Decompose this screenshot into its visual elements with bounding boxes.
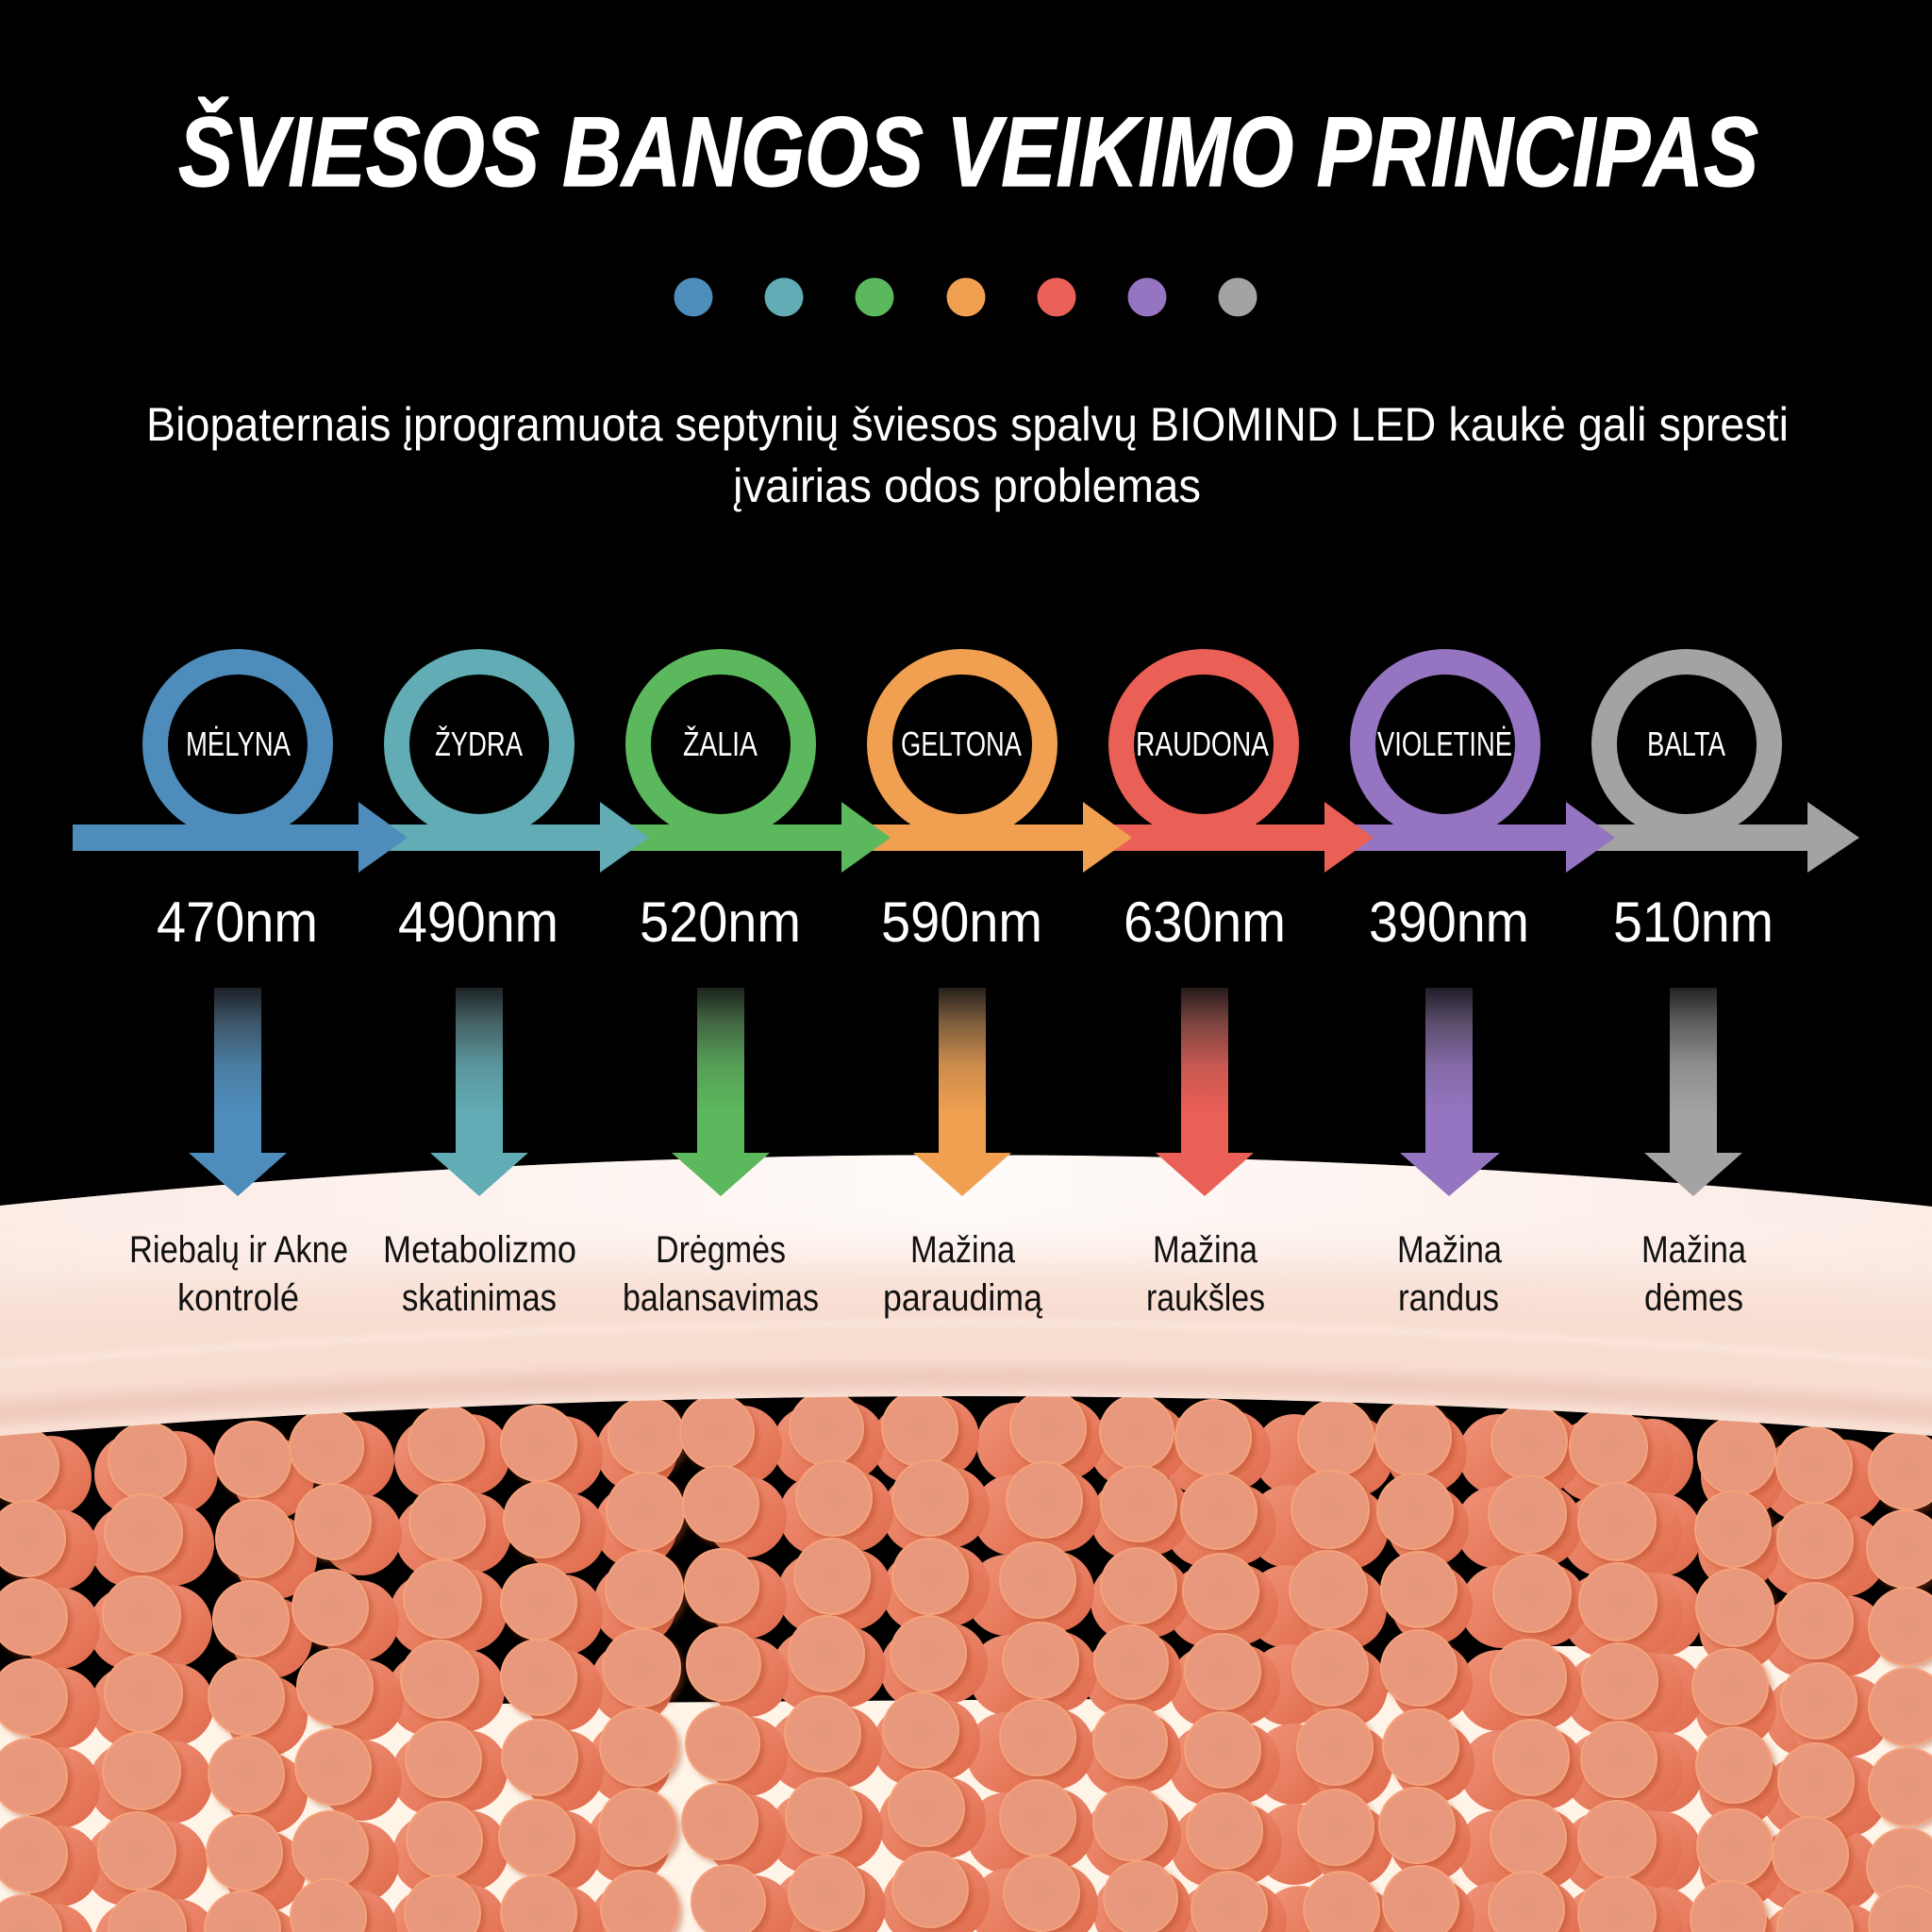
- colour dots row: [674, 277, 1257, 317]
- ring labels: VIOLETINĖ: [1377, 724, 1512, 763]
- skin band: [0, 1155, 1932, 1436]
- ring labels: GELTONA: [901, 724, 1022, 763]
- wavelength values: 520nm: [640, 891, 801, 954]
- rear discs: [13, 1400, 1887, 1932]
- benefit labels: raukšles: [1146, 1277, 1265, 1319]
- wavelength values: 490nm: [398, 891, 558, 954]
- benefit labels: [129, 1229, 1747, 1319]
- ring arrow: raudona: [1108, 662, 1374, 873]
- benefit labels: paraudimą: [883, 1277, 1043, 1319]
- front discs: [0, 1391, 1932, 1932]
- ring labels: RAUDONA: [1136, 724, 1269, 763]
- wavelength values: [157, 891, 1774, 954]
- ring labels: MĖLYNA: [186, 724, 291, 763]
- ring labels: [186, 724, 1725, 763]
- LED discs: [0, 1391, 1932, 1932]
- ring arrow: žalia: [625, 662, 891, 873]
- ring arrow: mėlyna: [73, 662, 408, 873]
- benefit labels: kontrolé: [177, 1277, 299, 1319]
- ring labels: ŽALIA: [683, 724, 758, 763]
- wavelength values: 630nm: [1124, 891, 1286, 954]
- benefit labels: skatinimas: [402, 1277, 557, 1319]
- ring arrow: geltona: [866, 662, 1132, 873]
- ring arrow: violetinė: [1349, 662, 1615, 873]
- ring labels: BALTA: [1647, 724, 1725, 763]
- benefit labels: Mažina: [910, 1229, 1016, 1271]
- benefit labels: Riebalų ir Akne: [129, 1229, 348, 1271]
- benefit labels: Mažina: [1641, 1229, 1747, 1271]
- wavelength values: 390nm: [1369, 891, 1529, 954]
- ring labels: ŽYDRA: [435, 724, 523, 763]
- benefit labels: balansavimas: [623, 1277, 819, 1319]
- wavelength chain of ring arrows: [73, 662, 1859, 873]
- benefit labels: dėmes: [1644, 1277, 1743, 1319]
- wavelength values: 510nm: [1613, 891, 1774, 954]
- subtitle: [146, 398, 1789, 512]
- wavelength values: 470nm: [157, 891, 318, 954]
- benefit labels: randus: [1398, 1277, 1499, 1319]
- ring arrow: žydra: [383, 662, 649, 873]
- subtitle: įvairias odos problemas: [733, 459, 1201, 512]
- benefit labels: Drėgmės: [656, 1229, 786, 1271]
- wavelength values: 590nm: [881, 891, 1042, 954]
- subtitle: Biopaternais įprogramuota septynių šviesos spalvų BIOMIND LED kaukė gali spresti: [146, 398, 1789, 451]
- benefit labels: Mažina: [1397, 1229, 1503, 1271]
- ring arrow: balta: [1591, 662, 1859, 873]
- downward light arrows: [189, 988, 1742, 1196]
- benefit labels: Metabolizmo: [383, 1229, 576, 1271]
- benefit labels: Mažina: [1153, 1229, 1258, 1271]
- LED panel background: [0, 1646, 1932, 1932]
